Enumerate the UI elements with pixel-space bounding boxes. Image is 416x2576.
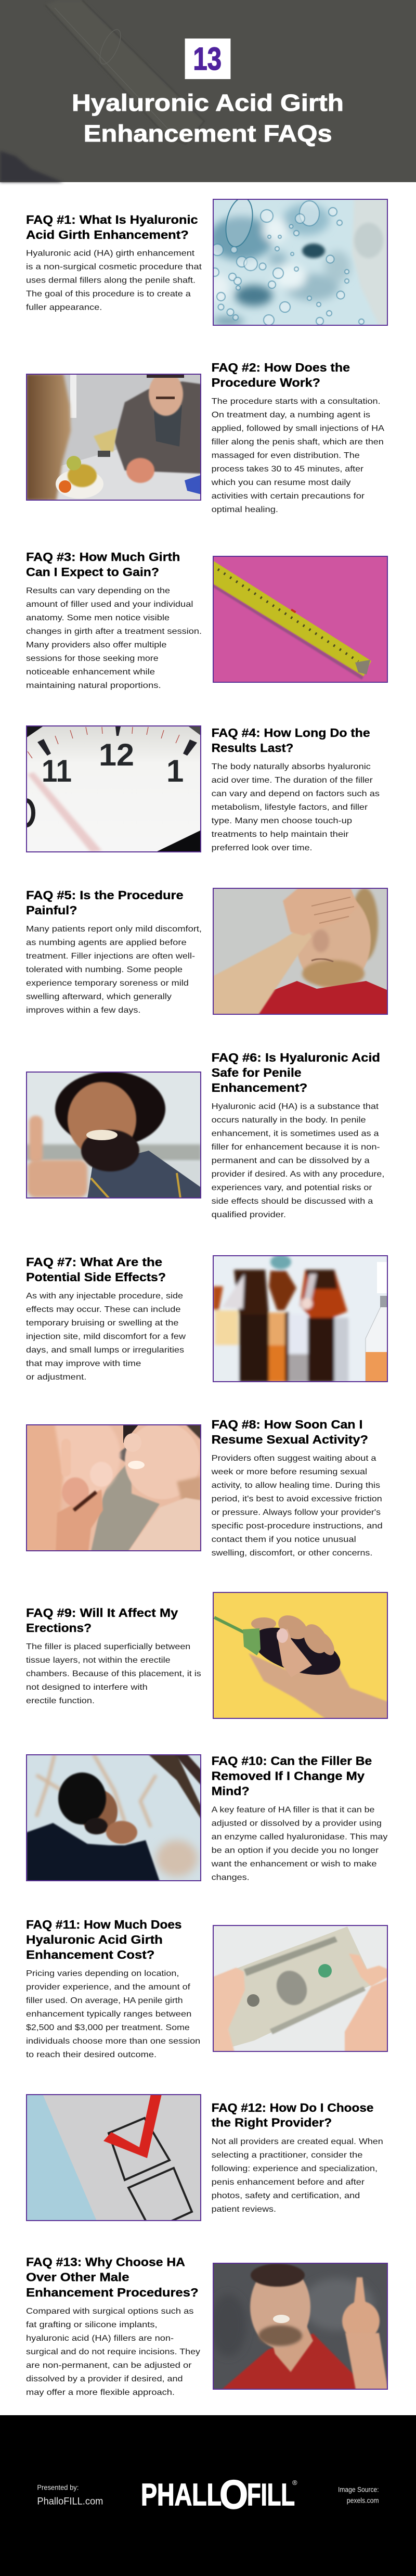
text: FAQ 12 answer: photos, safety and certification, and [212, 2191, 360, 2200]
text: FAQ 13 answer: fat grafting or silicone implants, [26, 2320, 158, 2329]
heading: FAQ 4: FAQ #4: How Long Do the [212, 726, 370, 739]
text: FAQ 5 answer: improves within a few days. [26, 1006, 140, 1015]
heading: FAQ 11: FAQ #11: How Much Does [26, 1918, 182, 1931]
panel: FAQ 5 [26, 888, 388, 1015]
heading: FAQ 5: FAQ #5: Is the Procedure [26, 888, 184, 902]
image: clock: 11 [42, 754, 72, 788]
heading: FAQ 11: Enhancement Cost? [26, 1948, 154, 1961]
heading: FAQ 11: Hyaluronic Acid Girth [26, 1933, 163, 1946]
text: FAQ 11 answer: Pricing varies depending on location, [26, 1969, 179, 1978]
text: FAQ 12 answer: patient reviews. [212, 2205, 276, 2214]
panel: FAQ 6 [26, 1051, 384, 1219]
heading: FAQ 3: FAQ #3: How Much Girth [26, 550, 180, 564]
heading: FAQ 8: Resume Sexual Activity? [212, 1433, 368, 1446]
text: FAQ 7 answer: temporary bruising or swelling at the [26, 1319, 179, 1328]
text: FAQ 7 answer: or adjustment. [26, 1373, 86, 1382]
text: FAQ 8 answer: period, it's best to avoid excessive friction [212, 1495, 382, 1503]
text: FAQ 8 answer: specific post-procedure instructions, and [212, 1522, 383, 1531]
text: FAQ 1 answer: fuller appearance. [26, 303, 102, 312]
text: FAQ 12 answer: selecting a practitioner, consider the [212, 2151, 363, 2160]
heading: FAQ 13: Enhancement Procedures? [26, 2286, 199, 2299]
text: FAQ 6 answer: occurs naturally in the body. In penile [212, 1116, 366, 1125]
text: FAQ 9 answer: chambers. Because of this placement, it is [26, 1669, 201, 1678]
heading: FAQ 4 [212, 726, 370, 755]
logo: PhalloFILL: O [219, 2471, 248, 2517]
heading: FAQ 12: the Right Provider? [212, 2116, 332, 2129]
text: FAQ 12 answer: following: experience and specialization, [212, 2164, 378, 2173]
text: FAQ 13 answer: dissolved by a provider if desired, and [26, 2375, 183, 2383]
text: FAQ 2 answer: filler along the penis shaft, which are then [212, 438, 384, 447]
heading: FAQ 5: Painful? [26, 903, 77, 917]
text: FAQ 1 answer [26, 249, 202, 312]
text: FAQ 6 answer: enhancement, it is sometimes used as a [212, 1129, 379, 1138]
presented by [37, 2483, 103, 2507]
text: FAQ 4 answer: type. Many men choose touch-up [212, 817, 352, 825]
text: FAQ 7 answer [26, 1292, 186, 1382]
text: FAQ 6 answer: provider if desired. As with any procedure, [212, 1170, 384, 1179]
text: FAQ 4 answer: metabolism, lifestyle factors, and filler [212, 803, 368, 812]
text: FAQ 11 answer: enhancement typically ranges between [26, 2010, 191, 2019]
image: red check mark on checklist [26, 2094, 201, 2221]
heading: FAQ 10: Mind? [212, 1784, 250, 1797]
image: man pointing upward [213, 2263, 388, 2390]
heading: FAQ 2 [212, 361, 350, 389]
number badge: 13 [193, 41, 222, 76]
image: measuring tape [213, 556, 388, 683]
text: FAQ 7 answer: days, and small lumps or irregularities [26, 1346, 184, 1355]
panel: FAQ 1 [26, 195, 388, 326]
text: FAQ 2 answer: optimal healing. [212, 505, 278, 514]
image: hand holding eggplant [213, 1592, 388, 1719]
text: FAQ 5 answer: treatment. Filler injections are often well- [26, 952, 195, 961]
panel: FAQ 12 [26, 2094, 383, 2230]
image: clock: 1 [166, 754, 184, 788]
text: FAQ 12 answer: penis enhancement before and after [212, 2178, 365, 2187]
text: FAQ 1 answer: is a non-surgical cosmetic procedure that [26, 262, 202, 272]
image: hands holding dollar bill [213, 1925, 388, 2052]
logo: PhalloFILL: FILL [247, 2478, 295, 2512]
heading: FAQ 2: Procedure Work? [212, 376, 320, 389]
panel: FAQ 2 [26, 361, 384, 514]
panel: FAQ 13 [26, 2255, 388, 2397]
panel: FAQ 10 [26, 1754, 387, 1882]
image: clock: 12 [99, 737, 134, 772]
text: FAQ 8 answer [211, 1454, 383, 1558]
text: FAQ 11 answer: filler used. On average, HA penile girth [26, 1996, 183, 2005]
text: FAQ 1 answer: The goal of this procedure is to create a [26, 289, 191, 299]
header banner [0, 0, 416, 182]
image: gel bubbles [213, 199, 388, 326]
heading: FAQ 6: Enhancement? [212, 1081, 307, 1094]
text: FAQ 12 answer: Not all providers are created equal. When [212, 2137, 383, 2146]
heading: FAQ 2: FAQ #2: How Does the [212, 361, 350, 374]
text: FAQ 2 answer: The procedure starts with a consultation. [212, 397, 381, 406]
text: FAQ 12 answer [212, 2137, 383, 2214]
heading: FAQ 9: Erections? [26, 1621, 92, 1635]
text: FAQ 4 answer: acid over time. The duration of the filler [212, 776, 373, 785]
text: FAQ 2 answer: process takes 30 to 45 minutes, after [212, 465, 364, 474]
logo: PhalloFILL: ® [292, 2479, 297, 2486]
image source: pexels.com [347, 2497, 379, 2505]
text: FAQ 3 answer: changes in girth after a treatment session. [26, 627, 202, 636]
text: FAQ 6 answer: filler for enhancement because it is non- [212, 1143, 380, 1152]
text: FAQ 13 answer: hyaluronic acid (HA) fillers are non- [26, 2334, 174, 2343]
text: FAQ 6 answer: experiences vary, and potential risks or [212, 1183, 372, 1192]
title [72, 90, 344, 147]
text: FAQ 11 answer: provider experience, and the amount of [26, 1983, 190, 1992]
text: FAQ 3 answer: sessions for those seeking more [26, 654, 159, 663]
text: FAQ 8 answer: Providers often suggest waiting about a [212, 1454, 376, 1463]
heading: FAQ 9 [26, 1606, 178, 1635]
image: thoughtful man [26, 1754, 201, 1881]
text: FAQ 13 answer: surgical and do not require incisions. They [26, 2348, 200, 2356]
heading: FAQ 6: Safe for Penile [212, 1066, 302, 1079]
text: FAQ 3 answer: noticeable enhancement while [26, 668, 155, 677]
footer [0, 2415, 416, 2576]
text: FAQ 3 answer [26, 586, 202, 690]
heading: FAQ 10: Removed If I Change My [212, 1769, 365, 1783]
text: FAQ 2 answer: massaged for even distribution. The [212, 451, 360, 460]
heading: FAQ 7: Potential Side Effects? [26, 1270, 166, 1284]
heading: FAQ 6: FAQ #6: Is Hyaluronic Acid [212, 1051, 380, 1064]
presented by: Presented by: [37, 2483, 79, 2492]
text: FAQ 1 answer: Hyaluronic acid (HA) girth enhancement [26, 249, 195, 258]
image: consultation [26, 374, 201, 501]
heading: FAQ 5 [26, 888, 184, 917]
text: FAQ 9 answer: erectile function. [26, 1697, 95, 1705]
text: FAQ 5 answer: experience temporary soreness or mild [26, 979, 189, 988]
heading: FAQ 1 [26, 213, 198, 241]
logo: PhalloFILL [141, 2471, 297, 2517]
text: FAQ 4 answer: can vary and depend on factors such as [212, 789, 380, 798]
text: FAQ 10 answer: be an option if you decide you no longer [212, 1846, 379, 1855]
title: Enhancement FAQs [84, 120, 332, 147]
heading: FAQ 3 [26, 550, 180, 579]
text: FAQ 6 answer: permanent and can be dissolved by a [212, 1156, 370, 1165]
image source [338, 2486, 379, 2505]
panel: FAQ 11 [26, 1918, 388, 2059]
pipette illustration [0, 0, 204, 182]
heading: FAQ 13 [26, 2255, 199, 2299]
heading: FAQ 8: FAQ #8: How Soon Can I [212, 1418, 362, 1431]
text: FAQ 13 answer: are non-permanent, can be adjusted or [26, 2361, 192, 2370]
text: FAQ 2 answer: applied, followed by small injections of HA [212, 424, 384, 433]
text: FAQ 10 answer: an enzyme called hyaluronidase. This may [212, 1833, 387, 1842]
text: FAQ 8 answer: contact them if you notice unusual [212, 1535, 356, 1544]
text: FAQ 3 answer: maintaining natural proportions. [26, 681, 161, 690]
text: FAQ 5 answer [26, 925, 202, 1015]
text: FAQ 10 answer: want the enhancement or wish to make [211, 1860, 377, 1869]
heading: FAQ 1: Acid Girth Enhancement? [26, 228, 189, 241]
text: FAQ 4 answer: treatments to help maintain their [212, 830, 349, 839]
image source: Image Source: [338, 2486, 379, 2494]
heading: FAQ 9: FAQ #9: Will It Affect My [26, 1606, 178, 1619]
heading: FAQ 8 [212, 1418, 368, 1446]
panel: FAQ 9 [26, 1592, 388, 1719]
text: FAQ 11 answer [26, 1969, 200, 2059]
text: FAQ 11 answer: $2,500 and $3,000 per treatment. Some [26, 2023, 190, 2032]
text: FAQ 6 answer: side effects should be discussed with a [212, 1197, 373, 1206]
text: FAQ 11 answer: individuals choose more than one session [26, 2037, 200, 2046]
text: FAQ 2 answer [211, 397, 384, 514]
logo: PhalloFILL: PHALL [141, 2478, 222, 2512]
number badge [185, 39, 230, 79]
title: Hyaluronic Acid Girth [72, 90, 344, 116]
image: amber bottles [213, 1255, 388, 1382]
text: FAQ 3 answer: amount of filler used and your individual [26, 600, 193, 609]
text: FAQ 9 answer: tissue layers, not within the erectile [26, 1656, 171, 1665]
text: FAQ 3 answer: Many providers also offer multiple [26, 641, 167, 649]
heading: FAQ 13: Over Other Male [26, 2271, 129, 2284]
image: laughing couple [26, 1424, 201, 1551]
heading: FAQ 7: FAQ #7: What Are the [26, 1255, 162, 1269]
text: FAQ 4 answer: preferred look over time. [212, 844, 312, 852]
text: FAQ 8 answer: week or more before resuming sexual [211, 1468, 367, 1476]
heading: FAQ 3: Can I Expect to Gain? [26, 565, 159, 579]
presented by: PhalloFILL.com [37, 2496, 103, 2507]
text: FAQ 13 answer: may offer a more flexible approach. [26, 2388, 175, 2397]
image: clock [26, 725, 201, 852]
panel: FAQ 3 [26, 550, 388, 690]
text: FAQ 9 answer: The filler is placed superficially between [26, 1642, 190, 1651]
text: FAQ 10 answer: changes. [212, 1873, 250, 1882]
text: FAQ 5 answer: Many patients report only mild discomfort, [26, 925, 202, 934]
text: FAQ 1 answer: uses dermal fillers along the penile shaft. [26, 276, 196, 285]
heading: FAQ 12 [212, 2101, 373, 2129]
text: FAQ 13 answer [26, 2307, 200, 2397]
heading: FAQ 11 [26, 1918, 182, 1961]
text: FAQ 7 answer: effects may occur. These can include [26, 1305, 181, 1314]
text: FAQ 2 answer: On treatment day, a numbing agent is [212, 411, 370, 419]
heading: FAQ 10: FAQ #10: Can the Filler Be [212, 1754, 372, 1767]
text: FAQ 5 answer: swelling afterward, which generally [26, 992, 172, 1001]
text: FAQ 6 answer [212, 1102, 384, 1219]
panel: FAQ 4 [19, 725, 380, 852]
heading: FAQ 1: FAQ #1: What Is Hyaluronic [26, 213, 198, 226]
text: FAQ 8 answer: activity, to allow healing time. During this [212, 1481, 380, 1490]
text: FAQ 9 answer: not designed to interfere with [26, 1683, 148, 1692]
text: FAQ 6 answer: qualified provider. [212, 1210, 286, 1219]
text: FAQ 4 answer [212, 762, 380, 852]
text: FAQ 5 answer: as numbing agents are applied before [26, 938, 187, 947]
panel: FAQ 7 [26, 1255, 388, 1382]
panel: FAQ 8 [26, 1413, 383, 1558]
heading: FAQ 10 [212, 1754, 372, 1797]
heading: FAQ 6 [212, 1051, 380, 1094]
text: FAQ 8 answer: or pressure. Always follow your provider's [212, 1508, 381, 1517]
text: FAQ 6 answer: Hyaluronic acid (HA) is a substance that [212, 1102, 379, 1111]
text: FAQ 13 answer: Compared with surgical options such as [26, 2307, 193, 2316]
text: FAQ 4 answer: The body naturally absorbs hyaluronic [212, 762, 371, 771]
text: FAQ 7 answer: that may improve with time [26, 1359, 141, 1368]
heading: FAQ 7 [26, 1255, 166, 1284]
text: FAQ 8 answer: swelling, discomfort, or other concerns. [212, 1549, 372, 1558]
image: man holding head [213, 888, 388, 1015]
text: FAQ 2 answer: activities with certain precautions for [212, 492, 365, 501]
heading: FAQ 4: Results Last? [212, 741, 293, 755]
text: FAQ 10 answer [211, 1806, 387, 1882]
heading: FAQ 13: FAQ #13: Why Choose HA [26, 2255, 185, 2269]
text: FAQ 7 answer: injection site, mild discomfort for a few [26, 1332, 186, 1341]
text: FAQ 7 answer: As with any injectable procedure, side [26, 1292, 183, 1300]
text: FAQ 10 answer: A key feature of HA filler is that it can be [212, 1806, 375, 1815]
text: FAQ 9 answer [26, 1642, 201, 1705]
text: FAQ 2 answer: which you can resume most daily [211, 478, 350, 487]
text: FAQ 5 answer: tolerated with numbing. Some people [26, 965, 183, 974]
text: FAQ 10 answer: adjusted or dissolved by a provider using [212, 1819, 382, 1828]
text: FAQ 11 answer: to reach their desired outcome. [26, 2050, 157, 2059]
text: FAQ 3 answer: Results can vary depending on the [26, 586, 170, 595]
text: FAQ 3 answer: anatomy. Some men notice visible [26, 614, 170, 622]
image: smiling man thumbs up [26, 1072, 201, 1198]
heading: FAQ 12: FAQ #12: How Do I Choose [212, 2101, 373, 2114]
